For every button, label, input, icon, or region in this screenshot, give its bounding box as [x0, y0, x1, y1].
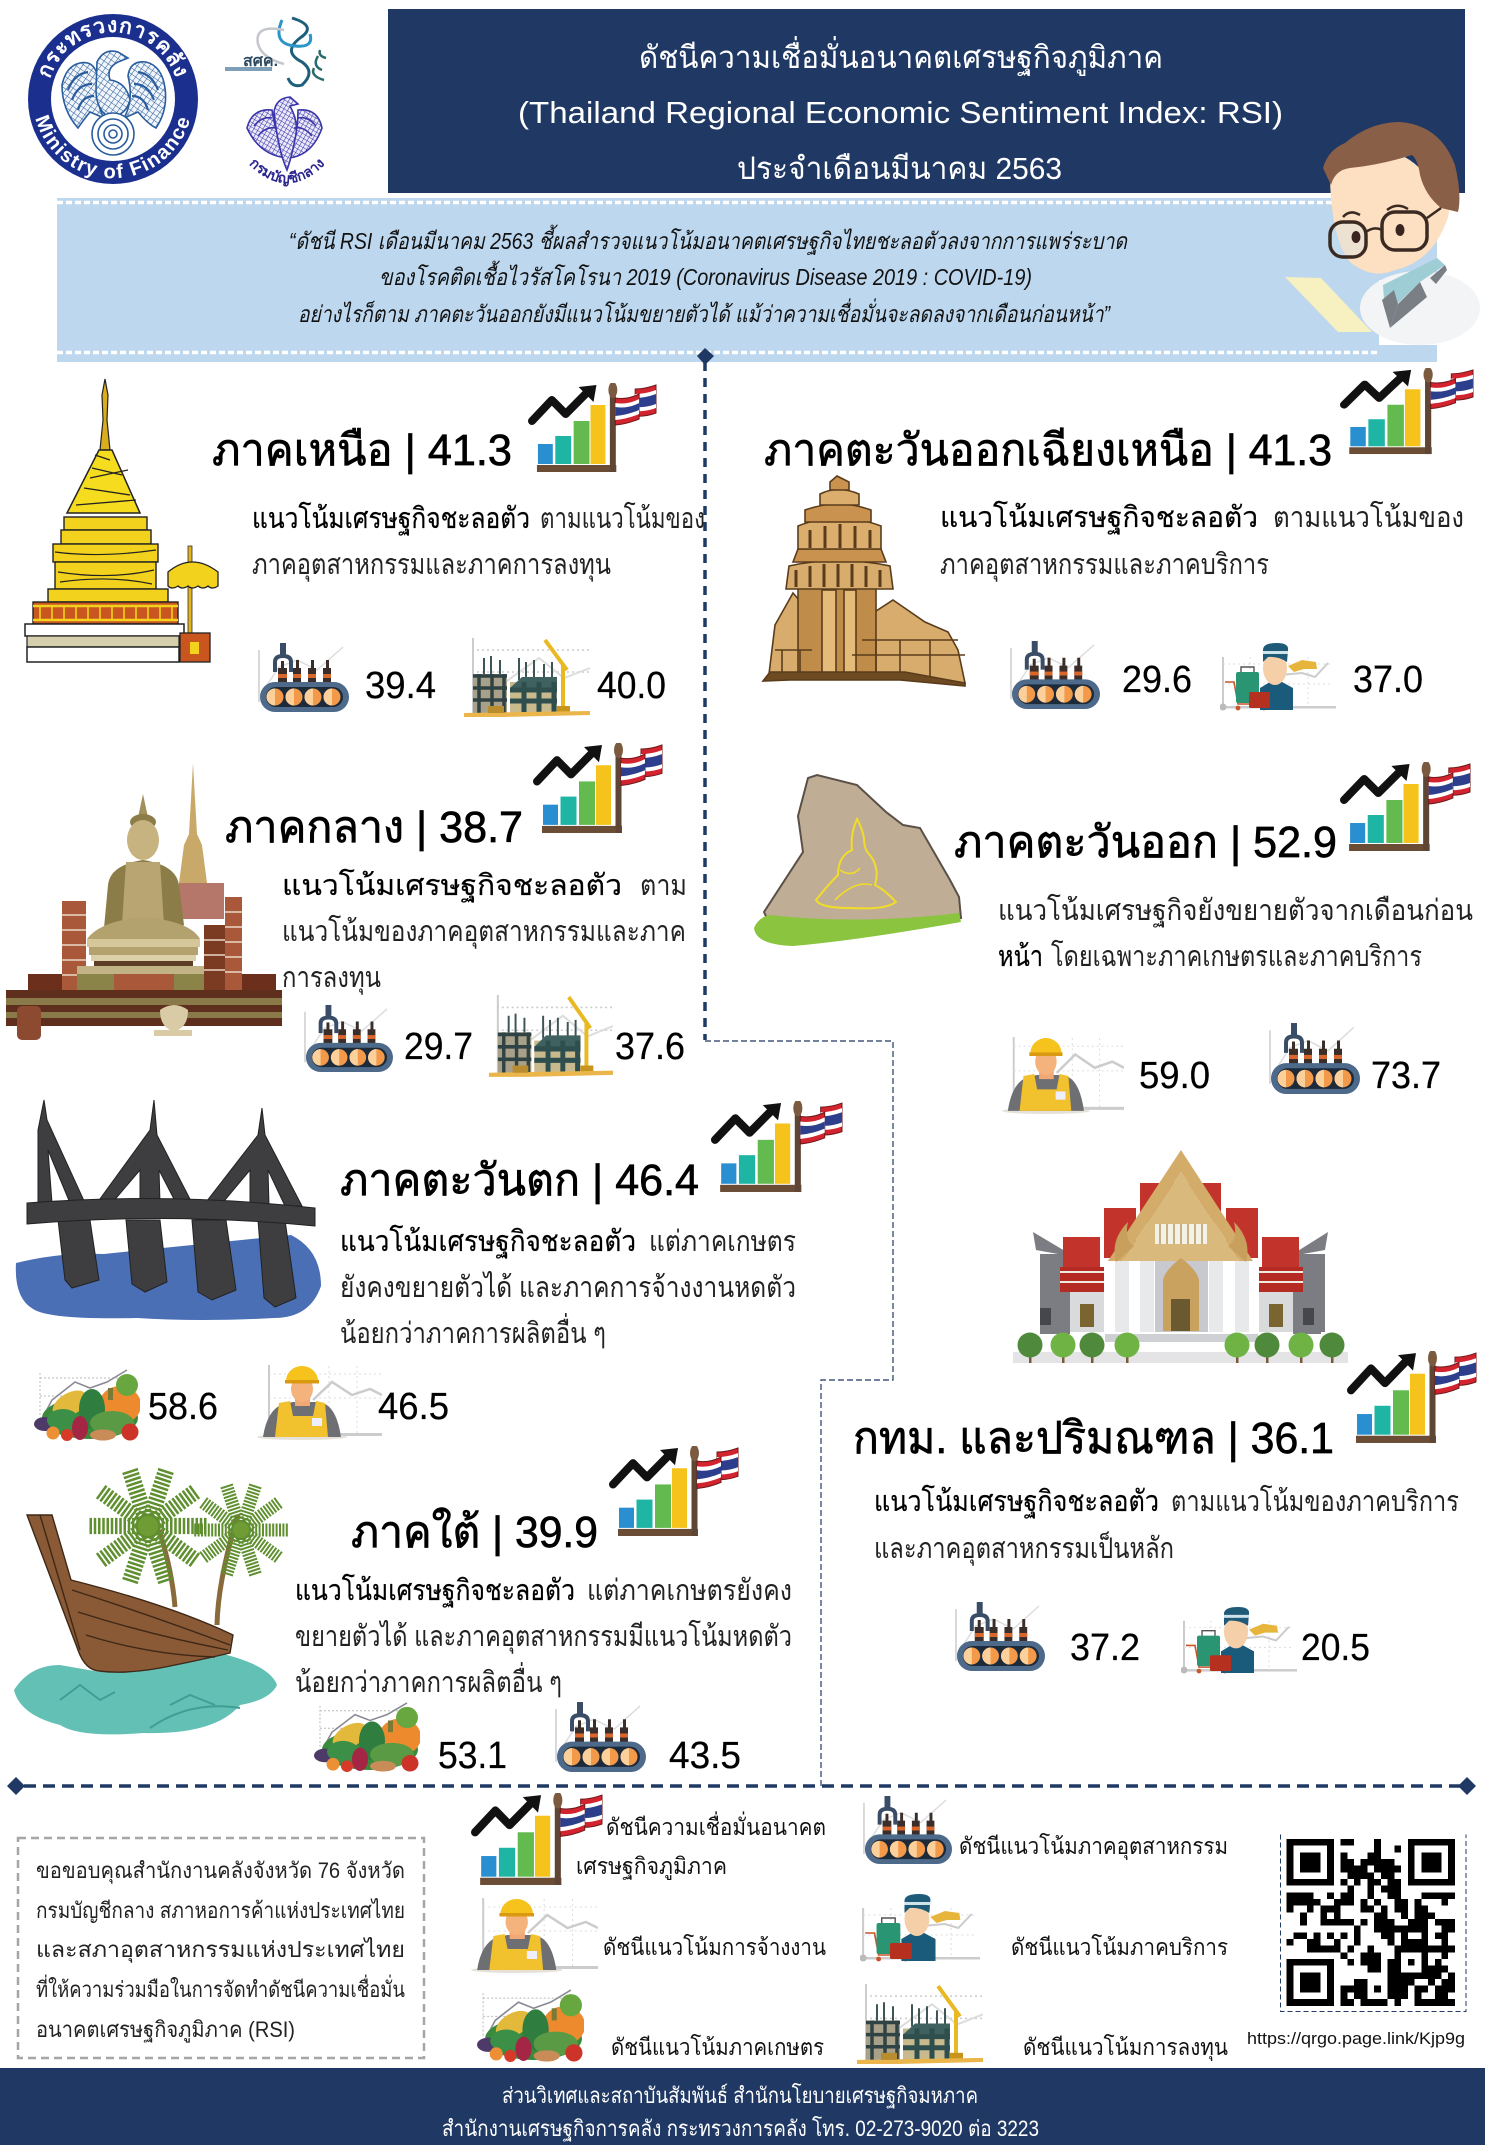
logo: Comptroller General's Department: กรมบัญชีกลาง — [249, 159, 324, 186]
summary text: แนวโน้มเศรษฐกิจชะลอตัว — [282, 868, 622, 903]
value: industry: 39.4 — [365, 665, 436, 707]
logo: Fiscal Policy Office — [225, 18, 326, 86]
summary text — [998, 893, 1473, 973]
divider: bottom dashed line — [7, 1777, 1476, 1795]
illustration: doctor reading a document — [1285, 122, 1485, 345]
summary text: การลงทุน — [282, 962, 381, 995]
value: agriculture: 58.6 — [148, 1386, 218, 1428]
icon: industry — [556, 1702, 646, 1772]
summary text: แนวโน้มเศรษฐกิจชะลอตัว — [252, 501, 530, 536]
value: industry: 37.2 — [1070, 1627, 1140, 1669]
footer: ส่วนวิเทศและสถาบันสัมพันธ์ สำนักนโยบายเศรษฐกิจมหภาค — [502, 2083, 978, 2109]
legend: RSI: ดัชนีความเชื่อมั่นอนาคต — [606, 1811, 826, 1840]
panel: Bangkok and vicinity — [853, 1350, 1476, 1674]
icon: RSI chart — [537, 742, 662, 833]
quote line 3: อย่างไรก็ตาม ภาคตะวันออกยังมีแนวโน้มขยายตัวได้ แม้ว่าความเชื่อมั่นจะลดลงจากเดือนก่อนหน้า” — [298, 298, 1111, 327]
legend: investment: ดัชนีแนวโน้มการลงทุน — [1023, 2034, 1228, 2061]
value: industry: 29.7 — [404, 1026, 473, 1068]
panel: legend — [471, 1792, 1228, 2064]
value: industry: 73.7 — [1371, 1055, 1441, 1097]
footer: สำนักงานเศรษฐกิจการคลัง กระทรวงการคลัง โทร. 02-273-9020 ต่อ 3223 — [442, 2116, 1039, 2142]
icon: investment — [464, 638, 590, 717]
landmark: long-tail boat and palms — [14, 1469, 289, 1734]
panel: acknowledgements: และสภาอุตสาหกรรมแห่งประเทศไทย — [36, 1937, 405, 1963]
icon: RSI chart — [532, 382, 656, 472]
legend: employment — [471, 1898, 826, 1973]
legend: industry: ดัชนีแนวโน้มภาคอุตสาหกรรม — [959, 1833, 1228, 1860]
value: industry: 43.5 — [669, 1735, 741, 1777]
summary text: น้อยกว่าภาคการผลิตอื่น ๆ — [340, 1313, 606, 1350]
icon: RSI chart — [613, 1445, 738, 1536]
panel: Central region — [6, 742, 687, 1077]
value: investment: 37.6 — [615, 1026, 685, 1068]
panel: East region — [754, 761, 1473, 1114]
icon: RSI chart — [1351, 1350, 1476, 1443]
summary text — [252, 501, 705, 582]
legend: service: ดัชนีแนวโน้มภาคบริการ — [1011, 1934, 1228, 1960]
heading: ภาคเหนือ | 41.3 — [212, 426, 512, 475]
icon: employment — [257, 1365, 382, 1440]
icon: RSI chart — [715, 1100, 842, 1192]
legend: investment — [857, 1984, 1228, 2064]
icon: RSI chart — [1344, 367, 1473, 454]
summary text: แนวโน้มเศรษฐกิจชะลอตัว — [874, 1484, 1159, 1519]
summary text: ยังคงขยายตัวได้ และภาคการจ้างงานหดตัว — [340, 1270, 796, 1304]
footer — [0, 2068, 1485, 2145]
heading: ภาคตะวันออก | 52.9 — [954, 818, 1337, 867]
summary text: แนวโน้มของภาคอุตสาหกรรมและภาค — [282, 914, 686, 949]
heading: กทม. และปริมณฑล | 36.1 — [853, 1414, 1334, 1463]
summary text: ตามแนวโน้มของ — [540, 501, 705, 535]
heading: ภาคตะวันออกเฉียงเหนือ | 41.3 — [764, 426, 1332, 475]
panel: acknowledgements: ขอขอบคุณสำนักงานคลังจังหวัด 76 จังหวัด — [36, 1858, 405, 1884]
summary text: ภาคอุตสาหกรรมและภาคการลงทุน — [252, 549, 611, 582]
summary text — [940, 500, 1464, 582]
summary text: แต่ภาคเกษตรยังคง — [587, 1575, 792, 1607]
panel: acknowledgements: ที่ให้ความร่วมมือในการจัดทำดัชนีความเชื่อมั่น — [36, 1974, 405, 2002]
divider: centre dashed line — [697, 348, 893, 1786]
quote banner — [57, 198, 1437, 362]
logo: Ministry of Finance: กระทรวงการคลัง — [40, 20, 186, 78]
summary text: แนวโน้มเศรษฐกิจชะลอตัว — [295, 1573, 575, 1608]
QR link: https://qrgo.page.link/Kjp9g — [1247, 2029, 1465, 2048]
summary text: ตามแนวโน้มของ — [1273, 500, 1464, 534]
landmark: Rama VIII style bridge — [16, 1100, 321, 1320]
illustration: marble temple — [1013, 1150, 1348, 1363]
value: service: 37.0 — [1353, 659, 1423, 701]
heading: ภาคตะวันตก | 46.4 — [340, 1156, 699, 1205]
legend: agriculture — [477, 1990, 824, 2062]
legend: RSI — [475, 1792, 826, 1885]
summary text: แต่ภาคเกษตร — [649, 1226, 796, 1258]
legend: service — [859, 1894, 1228, 1962]
legend: RSI: เศรษฐกิจภูมิภาค — [576, 1853, 727, 1880]
icon: industry — [305, 1005, 393, 1072]
value: investment: 40.0 — [597, 665, 666, 707]
QR code — [1280, 1834, 1466, 2012]
icon: employment — [1002, 1037, 1124, 1114]
heading: ภาคใต้ | 39.9 — [351, 1507, 598, 1557]
icon: industry — [259, 643, 349, 712]
summary text: ตาม — [640, 870, 687, 902]
landmark: stone monument — [763, 476, 965, 686]
icon: agriculture — [314, 1703, 421, 1772]
panel: South region — [14, 1445, 792, 1777]
summary text: แนวโน้มเศรษฐกิจชะลอตัว — [340, 1224, 636, 1259]
value: service: 20.5 — [1301, 1627, 1370, 1669]
title line 3: ประจำเดือนมีนาคม 2563 — [737, 151, 1062, 186]
panel: acknowledgements: กรมบัญชีกลาง สภาหอการค้าแห่งประเทศไทย — [36, 1898, 405, 1923]
landmark: Buddha rock carving — [754, 775, 961, 946]
quote line 1: “ดัชนี RSI เดือนมีนาคม 2563 ชี้ผลสำรวจแนวโน้มอนาคตเศรษฐกิจไทยชะลอตัวลงจากการแพร่ระบาด — [289, 224, 1128, 255]
icon: service — [1220, 643, 1336, 710]
landmark: seated Buddha — [6, 763, 282, 1040]
icon: RSI chart — [1344, 761, 1470, 851]
value: agriculture: 53.1 — [438, 1735, 507, 1777]
panel: acknowledgements: อนาคตเศรษฐกิจภูมิภาค (RSI) — [36, 2017, 295, 2043]
summary text: หน้า — [998, 941, 1043, 973]
title line 2: (Thailand Regional Economic Sentiment Index: RSI) — [518, 95, 1283, 130]
logo: Comptroller General's Department — [246, 96, 324, 186]
value: employment: 59.0 — [1139, 1055, 1210, 1097]
panel: acknowledgements — [18, 1838, 424, 2058]
icon: industry — [956, 1602, 1045, 1671]
value: employment: 46.5 — [378, 1386, 449, 1428]
heading: ภาคกลาง | 38.7 — [225, 803, 523, 852]
header panel — [388, 9, 1465, 193]
panel: West region — [16, 1100, 842, 1441]
logo: Ministry of Finance: Ministry of Finance — [36, 114, 189, 178]
icon: agriculture — [34, 1370, 141, 1441]
summary text: น้อยกว่าภาคการผลิตอื่น ๆ — [295, 1662, 562, 1699]
summary text — [282, 868, 687, 995]
logo: Ministry of Finance — [28, 14, 198, 184]
legend: agriculture: ดัชนีแนวโน้มภาคเกษตร — [611, 2034, 824, 2060]
summary text — [340, 1224, 796, 1350]
summary text — [295, 1573, 792, 1699]
summary text: แนวโน้มเศรษฐกิจชะลอตัว — [940, 500, 1258, 535]
icon: investment — [489, 995, 613, 1077]
legend: employment: ดัชนีแนวโน้มการจ้างงาน — [603, 1934, 826, 1960]
summary text: ขยายตัวได้ และภาคอุตสาหกรรมมีแนวโน้มหดตัว — [295, 1619, 792, 1654]
icon: service — [1180, 1607, 1297, 1674]
value: industry: 29.6 — [1122, 659, 1192, 701]
logo: Fiscal Policy Office: สศค. — [243, 53, 278, 70]
icon: industry — [1270, 1023, 1360, 1094]
title line 1: ดัชนีความเชื่อมั่นอนาคตเศรษฐกิจภูมิภาค — [639, 36, 1163, 76]
summary text: และภาคอุตสาหกรรมเป็นหลัก — [874, 1530, 1174, 1566]
summary text: ภาคอุตสาหกรรมและภาคบริการ — [940, 549, 1269, 582]
summary text — [874, 1484, 1459, 1566]
quote line 2: ของโรคติดเชื้อไวรัสโคโรนา 2019 (Coronavirus Disease 2019 : COVID-19) — [379, 260, 1032, 290]
legend: industry — [864, 1796, 1228, 1864]
panel: North region — [25, 379, 705, 717]
icon: industry — [1011, 641, 1100, 709]
panel: Northeast region — [763, 367, 1473, 710]
landmark: golden stupa — [25, 379, 218, 662]
